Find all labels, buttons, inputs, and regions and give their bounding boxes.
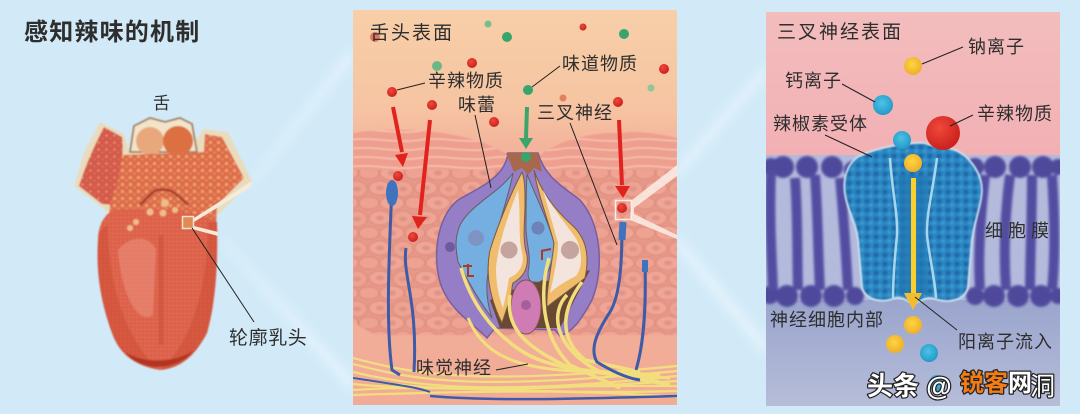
light streaks connecting the panels — [222, 48, 766, 392]
watermark: 网 — [1008, 370, 1032, 397]
green taste molecules — [432, 20, 654, 162]
panel: trigeminal surface — [761, 12, 1066, 406]
upper extracellular zone — [766, 12, 1060, 157]
taste bud — [437, 153, 599, 338]
panel heading and labels: 味道物质 — [562, 54, 638, 74]
panel heading and labels: 细胞膜 — [985, 221, 1054, 241]
magnified trigeminal ending — [616, 165, 677, 239]
panel background — [353, 10, 677, 405]
panel heading and labels — [370, 22, 638, 378]
lipid bilayer — [761, 156, 1066, 307]
panel heading and labels: 辣椒素受体 — [773, 114, 868, 134]
red pungent molecules — [370, 24, 669, 242]
panel heading and labels: 舌头表面 — [370, 22, 454, 44]
tongue label: 舌 — [153, 94, 170, 113]
panel heading and labels: 神经细胞内部 — [770, 310, 884, 330]
panel heading and labels — [770, 21, 1054, 352]
trigeminal nerves — [353, 180, 677, 399]
watermark — [867, 369, 1055, 401]
panel heading and labels: 味觉神经 — [416, 358, 492, 378]
icon: tongue illustration — [74, 118, 252, 370]
title: 感知辣味的机制 — [24, 18, 200, 46]
panel heading and labels: 辛辣物质 — [428, 71, 504, 91]
panel heading and labels: 钙离子 — [785, 71, 842, 91]
panel heading and labels: 三叉神经表面 — [777, 21, 903, 43]
panel heading and labels: 阳离子流入 — [958, 332, 1053, 352]
panel heading and labels: 味蕾 — [458, 95, 496, 115]
leader lines — [825, 47, 973, 330]
watermark: 洞 — [1030, 373, 1055, 401]
taste nerves — [353, 258, 677, 397]
ions — [873, 57, 960, 391]
panel heading and labels: 三叉神经 — [537, 103, 613, 123]
tissue layers — [353, 130, 677, 335]
pointer: magnified papilla box — [182, 181, 252, 236]
label: circumvallate papilla: 轮廓乳头 — [229, 327, 307, 349]
intracellular zone — [766, 300, 1060, 406]
green arrow — [519, 107, 533, 149]
watermark: 锐客 — [960, 369, 1008, 397]
watermark: 头条 @ — [867, 371, 952, 401]
panel: tongue — [74, 94, 307, 370]
panel heading and labels: 辛辣物质 — [977, 104, 1053, 124]
receptor channel — [844, 143, 982, 304]
red arrows — [393, 107, 630, 229]
leader line — [192, 228, 254, 322]
panel: tongue surface — [353, 10, 677, 405]
yellow influx arrow — [904, 178, 922, 310]
membrane background — [766, 155, 1060, 305]
leader lines — [397, 66, 617, 370]
panel heading and labels: 钠离子 — [968, 37, 1025, 57]
